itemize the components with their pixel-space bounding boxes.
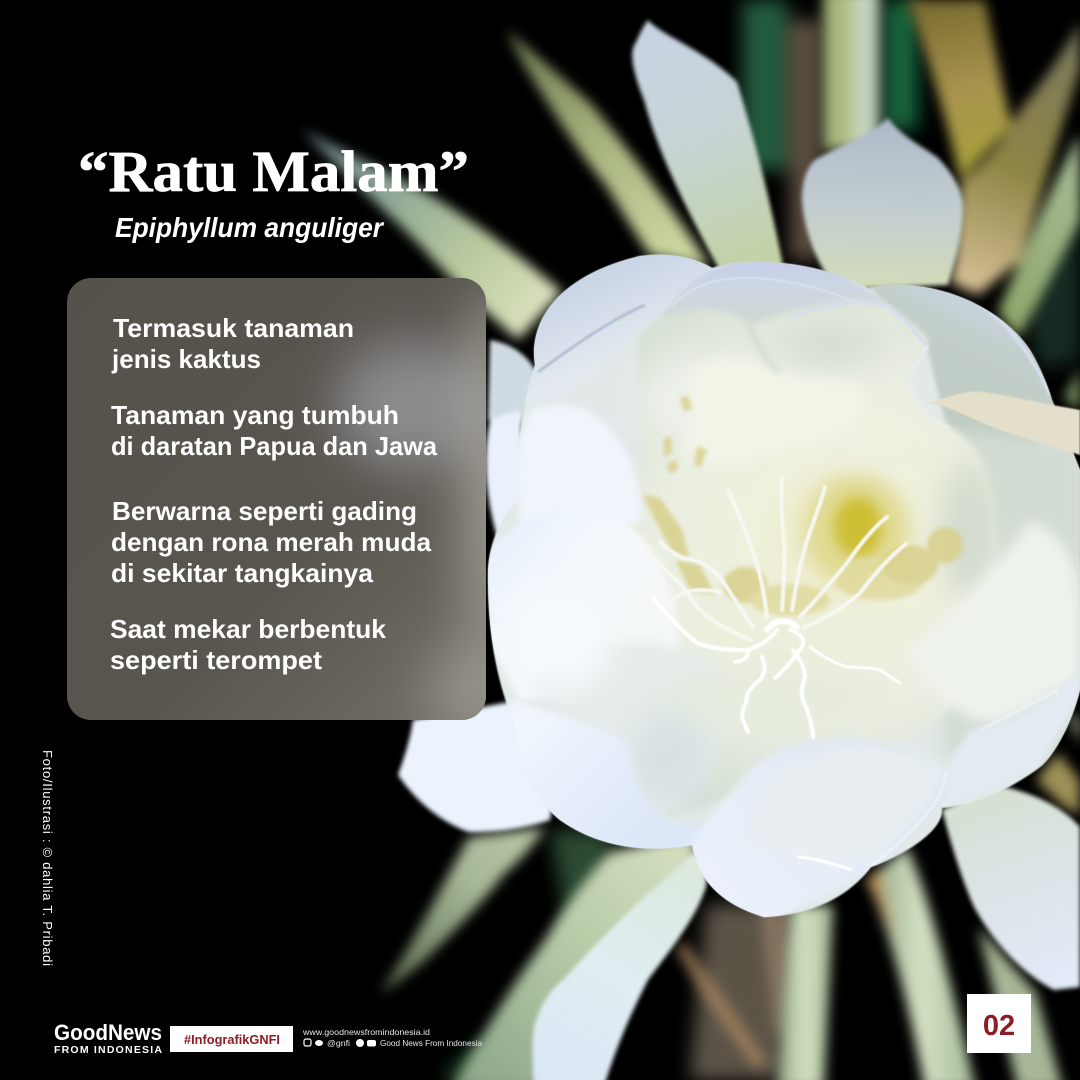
fact 4: Saat mekar berbentuk <box>110 614 387 644</box>
icon: instagram <box>304 1039 311 1046</box>
fact 1 <box>111 313 354 374</box>
footer: GoodNews logo <box>54 1020 162 1056</box>
footer: GoodNews logo: GoodNews <box>54 1020 162 1045</box>
fact 2 <box>111 400 438 461</box>
right white petal <box>905 522 1080 723</box>
footer: hashtag <box>170 1026 293 1052</box>
footer: website and social links <box>302 1027 482 1048</box>
upper left white petal <box>516 405 642 540</box>
page number: 02 <box>983 1010 1015 1042</box>
middle left white petal <box>484 511 680 700</box>
flower silhouette <box>488 255 1080 917</box>
footer: GoodNews logo: FROM INDONESIA <box>54 1044 162 1056</box>
right outer petal shade <box>940 430 1080 760</box>
fact 2: di daratan Papua dan Jawa <box>111 431 438 461</box>
fact 1: jenis kaktus <box>111 344 261 374</box>
outer upper petals <box>526 254 716 396</box>
stigma filaments <box>645 478 906 640</box>
inner cup <box>636 304 997 810</box>
fact 4: seperti terompet <box>110 645 322 675</box>
bottom central petal <box>692 738 892 917</box>
icon: facebook <box>356 1039 364 1047</box>
information panel <box>67 278 486 720</box>
fold shadow of left lobe <box>748 325 780 372</box>
fact 3: di sekitar tangkainya <box>111 558 374 588</box>
icon: twitter <box>315 1040 323 1046</box>
fact 3 <box>111 496 432 588</box>
pollen <box>643 396 963 616</box>
footer: website and social links: @gnfi <box>327 1038 350 1048</box>
foreground bud tip <box>928 392 1080 455</box>
fact 4 <box>110 614 387 675</box>
fact 1: Termasuk tanaman <box>113 313 354 343</box>
ruffled lobe highlight <box>725 363 856 454</box>
footer: hashtag: #InfografikGNFI <box>184 1033 280 1047</box>
footer: website and social links: www.goodnewsfromindonesia.id <box>302 1027 430 1037</box>
yellow throat <box>804 475 908 585</box>
lower left inner petal <box>593 644 712 810</box>
fact 3: Berwarna seperti gading <box>112 496 417 526</box>
fact 3: dengan rona merah muda <box>111 527 432 557</box>
subtitle: Epiphyllum anguliger <box>115 212 385 243</box>
background leaves and stems <box>303 0 1080 1080</box>
petals behind the flower <box>398 20 1080 1080</box>
icon: youtube <box>367 1040 376 1046</box>
lower right petal <box>942 670 1080 808</box>
page number <box>967 994 1031 1053</box>
flower <box>484 250 1080 925</box>
fact 2: Tanaman yang tumbuh <box>111 400 399 430</box>
photo credit: Foto/Ilustrasi : © dahlia T. Pribadi <box>40 750 55 966</box>
petal highlights <box>538 278 1058 870</box>
footer: website and social links: Good News From Indonesia <box>380 1038 482 1048</box>
title: “Ratu Malam” <box>78 139 469 204</box>
lower left outer petal <box>508 701 702 856</box>
